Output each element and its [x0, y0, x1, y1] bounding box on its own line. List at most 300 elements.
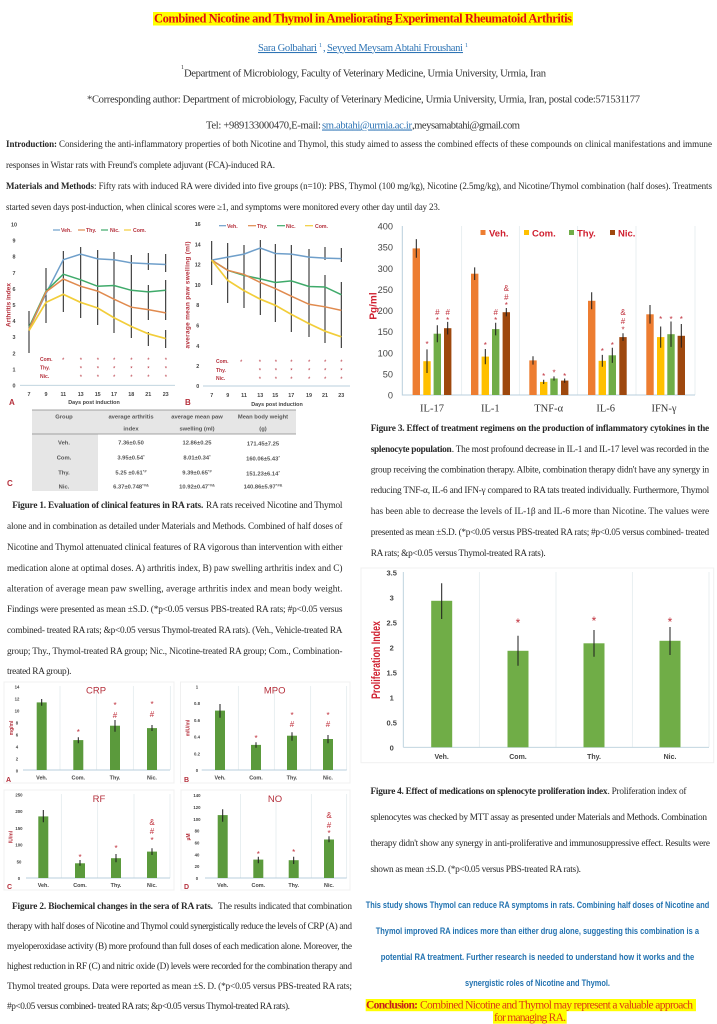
contact details: Tel: +989133000470,E-mail: — [206, 120, 321, 132]
panel 2A: CRP chart: CRP — [86, 686, 106, 696]
panel 2B: MPO chart: Thy. — [287, 776, 298, 782]
panel 2D: NO chart: & — [326, 811, 332, 820]
y axis title: Arthritis index — [6, 283, 12, 327]
figure 4 caption: Figure 4. Effect of medications on splenocyte proliferation index — [370, 787, 608, 797]
significance markers: * — [505, 301, 508, 310]
significance rows: Thy. — [40, 366, 51, 372]
table rows: *#& — [276, 482, 283, 488]
table rows: 151.23±6.14 — [246, 472, 278, 478]
table rows: Nic. — [59, 484, 70, 490]
category labels: Thy. — [587, 754, 601, 761]
y axis tick labels: 50 — [383, 369, 393, 379]
figure 4 caption: shown as mean ±S.D. (*p<0.05 versus PBS-treated RA rats). — [370, 864, 581, 875]
table rows: *#& — [208, 482, 215, 488]
y axis tick labels: 3.5 — [386, 568, 397, 578]
figure 1 caption: RA rats received Nicotine and Thymol — [206, 501, 343, 511]
line chart A: arthritis index — [6, 222, 175, 407]
conclusion: Combined Nicotine and Thymol may represent a valuable approach — [420, 1000, 693, 1012]
table header: Group — [55, 414, 73, 420]
significance markers — [516, 614, 673, 630]
table rows: 5.25 ±0.61 — [115, 470, 143, 476]
y axis tick labels: 16 — [195, 222, 201, 228]
panel 2A: CRP chart: * — [150, 700, 154, 709]
panel 2A: CRP chart: 4 — [16, 744, 19, 749]
panel 2D: NO chart: # — [327, 821, 332, 830]
significance rows — [216, 359, 343, 383]
panel letter C: C — [7, 479, 13, 488]
table rows: *# — [143, 468, 147, 474]
panel 2D: NO chart: NO — [268, 794, 282, 805]
y axis title: Proliferation Index — [369, 621, 383, 699]
figure 3 caption: presented as mean ±S.D. (*p<0.05 versus PBS-treated RA rats; #p<0.05 versus combined- treated — [371, 527, 710, 538]
line chart B: paw swelling — [184, 222, 350, 408]
figure 1 caption: Findings were presented as mean ±S.D. (*p<0.05 versus PBS-treated RA rats; #p<0.05 versus — [7, 604, 343, 615]
significance markers: # — [493, 308, 498, 317]
x axis tick labels: 11 — [60, 392, 66, 398]
figure 4 caption: . Proliferation index of — [608, 786, 687, 797]
panel 2C: RF chart: 150 — [15, 826, 23, 831]
figure 3 chart: cytokines — [368, 222, 695, 414]
figure 4 chart: proliferation index — [361, 568, 714, 763]
panel 2C: RF chart: 100 — [15, 843, 23, 848]
figure 3 caption: reducing TNF-α, IL-6 and IFN-γ compared to RA tats treated individually. Furthermore, Thymol — [371, 486, 710, 496]
y axis tick labels: 300 — [378, 264, 393, 274]
panel letter A: A — [9, 398, 15, 407]
y axis tick labels: 2 — [196, 364, 199, 370]
table header: average mean paw — [171, 414, 223, 420]
authors: Sara Golbahari — [258, 43, 317, 54]
table C: clinical feature summary — [7, 410, 296, 491]
significance rows: Com. — [40, 357, 53, 363]
significance rows: Nic. — [216, 376, 226, 382]
table rows: 10.92±0.47 — [179, 484, 208, 490]
panel 2A: CRP chart: 10 — [15, 708, 20, 714]
y axis tick labels: 2 — [12, 351, 16, 357]
panel 2B: MPO chart: 1 — [196, 684, 199, 690]
panel 2B: MPO chart: MPO — [264, 686, 286, 696]
significance rows: ****** — [80, 366, 168, 372]
affiliation: Department of Microbiology, Faculty of Veterinary Medicine, Urmia University, Urmia, Iran — [184, 68, 547, 80]
x axis tick labels — [28, 392, 169, 398]
table header: Mean body weight — [238, 414, 288, 420]
panel 2C: RF chart — [4, 790, 174, 891]
conclusion: Conclusion: — [366, 1000, 418, 1012]
error bars — [29, 247, 166, 353]
panel 2C: RF chart: RF — [93, 794, 106, 805]
contact details — [206, 120, 521, 132]
figure 2 caption: highest reduction in RF (C) and nitric oxide (D) levels were recorded for the combination therapy and — [7, 961, 352, 972]
x axis title: Days post induction — [68, 400, 120, 406]
y axis tick labels: 200 — [378, 306, 393, 316]
authors: 1 — [319, 43, 322, 49]
figure 3 caption — [371, 424, 710, 559]
panel 2D: NO chart: 80 — [195, 829, 200, 834]
y axis title: average mean paw swelling (ml) — [184, 242, 192, 348]
legend: Veh. — [61, 228, 72, 234]
significance rows: Com. — [216, 359, 229, 365]
panel 2D: NO chart: 120 — [193, 805, 201, 810]
table rows: * — [278, 454, 280, 460]
figure 1 caption: treated RA group). — [7, 666, 72, 677]
series: Com. — [212, 260, 341, 337]
panel 2B: MPO chart: # — [290, 720, 295, 729]
table rows: 160.06±5.43 — [246, 456, 278, 462]
y axis tick labels: 4 — [12, 319, 16, 325]
panel letter B: B — [185, 398, 191, 407]
panel 2B: MPO chart: B — [184, 777, 189, 784]
table rows: 7.36±0.50 — [118, 440, 144, 446]
panel 2D: NO chart: Com. — [252, 883, 266, 889]
significance rows: ****** — [80, 375, 168, 381]
category labels: IL-6 — [596, 404, 615, 414]
panel 2B: MPO chart: * — [254, 734, 258, 743]
panel 2D: NO chart — [181, 790, 350, 891]
summary statement: synergistic roles of Nicotine and Thymol. — [465, 978, 610, 988]
x axis tick labels: 21 — [322, 393, 328, 399]
figure 1 caption: alone and in combination as detailed under Materials and Methods. Combined of half doses of — [7, 521, 343, 532]
x axis tick labels: 11 — [241, 393, 247, 399]
legend: Thy. — [86, 228, 97, 234]
series: Thy. — [212, 260, 341, 310]
legend: Nic. — [286, 224, 296, 230]
panel 2A: CRP chart: 0 — [16, 768, 19, 773]
y axis tick labels — [195, 222, 201, 390]
x axis tick labels: 17 — [111, 392, 117, 398]
significance markers: * — [611, 341, 614, 350]
panel 2A: CRP chart: Com. — [72, 776, 86, 782]
x axis tick labels: 21 — [145, 392, 151, 398]
series: Nic. — [29, 274, 166, 327]
figure 2 caption: therapy with half doses of Nicotine and Thymol could synergistically reduce the levels of CRP (A) and — [7, 921, 352, 932]
conclusion: for managing RA. — [494, 1012, 566, 1024]
series: Veh. — [29, 254, 166, 329]
panel 2C: RF chart: Nic. — [147, 883, 157, 889]
category labels: TNF-α — [534, 404, 564, 414]
bars: Thy. — [434, 329, 675, 395]
significance markers: * — [680, 315, 683, 324]
significance markers: * — [542, 372, 545, 381]
legend — [219, 224, 329, 230]
panel 2A: CRP chart: A — [6, 777, 11, 784]
authors: Seyyed Meysam Abtahi Froushani — [327, 43, 463, 54]
conclusion — [366, 999, 696, 1024]
panel 2A: CRP chart: # — [150, 710, 155, 719]
significance markers: * — [669, 315, 673, 324]
panel 2C: RF chart: * — [114, 844, 118, 853]
x axis tick labels: 23 — [338, 393, 344, 399]
panel 2A: CRP chart: 14 — [15, 684, 20, 690]
significance markers: * — [659, 315, 662, 324]
panel 2B: MPO chart — [180, 682, 350, 784]
affiliation: 1 — [181, 65, 184, 71]
panel 2A: CRP chart: 6 — [16, 732, 19, 737]
y axis tick labels: 0 — [12, 384, 16, 390]
y axis tick labels: 6 — [12, 287, 16, 293]
panel 2B: MPO chart: 0.2 — [194, 751, 201, 756]
panel 2B: MPO chart: Nic. — [323, 776, 333, 782]
introduction text: Considering the anti-inflammatory properties of both Nicotine and Thymol, this study aimed to assess the combined effects of these compounds on clinical manifestations and immune — [59, 139, 712, 149]
significance markers: * — [425, 340, 429, 349]
y axis tick labels: 350 — [378, 243, 393, 253]
significance rows — [40, 357, 168, 381]
legend: Veh. — [227, 224, 238, 230]
materials and methods text: : Fifty rats with induced RA were divided into five groups (n=10): PBS, Thymol (100 mg/kg), Nicotine (2.5mg/kg), and Nicotine/Thymol combination (half doses). Treatments — [94, 181, 712, 191]
y axis tick labels: 100 — [378, 348, 393, 358]
x axis tick labels: 15 — [272, 393, 278, 399]
y axis tick labels: 9 — [12, 238, 16, 244]
table rows: 6.37±0.748 — [113, 484, 142, 490]
panel 2C: RF chart: 250 — [15, 792, 23, 798]
figure 2 caption: myeloperoxidase activity (B) more profound than full doses of each medication alone. Moreover, the — [7, 941, 352, 952]
figure 3 caption: group receiving the combination therapy. Albite, combination therapy didn't have any synergy in — [371, 466, 710, 476]
figure 1 caption: medication alone at optimal doses. A) arthritis index, B) paw swelling arthritis index and C) — [7, 563, 342, 574]
corresponding author: *Corresponding author: Department of microbiology, Faculty of Veterinary Medicine, Urmia University, Urmia, Iran, postal code:571531177 — [87, 94, 640, 106]
panel 2B: MPO chart: 0 — [196, 768, 199, 773]
y axis tick labels: 3 — [12, 335, 16, 341]
significance markers: * — [484, 341, 487, 350]
table rows: 3.95±0.54 — [117, 456, 143, 462]
figure 3 caption: . The most profound decrease in IL-1 and IL-17 level was recorded in the — [452, 444, 709, 455]
category labels: Veh. — [434, 754, 449, 761]
figure 1 caption: alteration of average mean paw swelling, average arthritis index and mean body weight. — [7, 584, 342, 594]
x axis tick labels: 7 — [28, 392, 30, 398]
series: Com. — [29, 294, 166, 339]
panel 2A: CRP chart: 12 — [15, 696, 20, 702]
panel 2A: CRP chart: 2 — [16, 756, 19, 761]
authors: 1 — [465, 43, 468, 49]
panel 2A: CRP chart: Veh. — [36, 776, 48, 782]
error bars — [442, 583, 670, 666]
panel 2D: NO chart: 60 — [195, 840, 200, 846]
panel 2C: RF chart: C — [7, 884, 12, 891]
category labels: Com. — [509, 754, 527, 761]
y axis title: Pg/ml — [368, 292, 380, 320]
x axis title: Days post induction — [251, 402, 303, 408]
x axis tick labels: 23 — [163, 392, 169, 398]
figure 1 caption: group; Thy., Thymol-treated RA group; Nic., Nicotine-treated RA group; Com., Combination- — [7, 647, 342, 657]
x axis tick labels: 7 — [210, 393, 213, 399]
panel 2C: RF chart: & — [149, 818, 155, 827]
contact details: sm.abtahi@urmia.ac.ir — [322, 120, 412, 132]
table rows: Thy. — [58, 470, 70, 476]
panel 2D: NO chart: * — [292, 848, 295, 857]
panel 2A: CRP chart — [4, 682, 174, 784]
significance markers: * — [563, 372, 566, 381]
category labels: IL-17 — [420, 404, 444, 414]
legend: Com. — [133, 228, 147, 234]
panel 2A: CRP chart: * — [77, 728, 80, 737]
figure 1 caption: Nicotine and Thymol attenuated clinical features of RA vigorous than intervention with either — [7, 542, 343, 553]
panel 2D: NO chart: Nic. — [324, 883, 334, 889]
panel 2D: NO chart: D — [184, 884, 189, 891]
panel 2B: MPO chart: * — [290, 711, 294, 720]
panel 2C: RF chart: IU/ml — [8, 830, 14, 843]
panel 2B: MPO chart: # — [326, 720, 331, 729]
x axis tick labels: 9 — [226, 393, 229, 399]
significance markers: * — [436, 316, 439, 325]
y axis tick labels — [11, 222, 17, 390]
error bars — [212, 240, 341, 348]
legend: Com. — [532, 228, 556, 240]
y axis tick labels: 8 — [196, 303, 199, 309]
panel 2A: CRP chart: Thy. — [110, 776, 121, 782]
table rows: 12.86±0.25 — [183, 440, 212, 446]
legend: Thy. — [577, 228, 596, 240]
introduction text — [6, 139, 712, 170]
panel 2B: MPO chart: * — [326, 711, 330, 720]
bars: Com. — [423, 337, 664, 395]
figure 3 caption: splenocyte population — [371, 445, 453, 455]
panel 2B: MPO chart: Veh. — [214, 776, 226, 782]
materials and methods text — [6, 181, 712, 212]
significance markers: & — [504, 284, 510, 293]
legend: Com. — [315, 224, 329, 230]
y axis tick labels: 10 — [11, 222, 17, 228]
figure 3 caption: has been able to decrease the levels of IL-1β and IL-6 more than Nicotine. The values were — [371, 506, 709, 517]
panel 2C: RF chart: * — [150, 836, 154, 845]
y axis tick labels: 0.5 — [386, 718, 397, 728]
figure 3 caption: Figure 3. Effect of treatment regimens on the production of inflammatory cytokines in the — [371, 424, 709, 434]
y axis tick labels: 150 — [378, 327, 393, 337]
panel 2A: CRP chart: 8 — [16, 720, 19, 725]
authors: , — [323, 43, 326, 54]
y axis tick labels: 7 — [12, 271, 16, 277]
significance markers: & — [620, 308, 626, 317]
x axis tick labels — [210, 393, 344, 399]
panel 2D: NO chart: 0 — [196, 876, 199, 881]
panel 2B: MPO chart: mIU/ml — [186, 719, 192, 736]
significance rows: ******* — [240, 360, 343, 366]
figure 2 caption — [7, 902, 352, 1012]
figure 2 caption: The results indicated that combination — [218, 902, 352, 912]
y axis tick labels: 2.5 — [386, 618, 397, 628]
significance markers: * — [668, 615, 673, 629]
table rows: 171.45±7.25 — [247, 442, 280, 448]
category labels: IL-1 — [481, 404, 500, 414]
y axis tick labels — [386, 568, 397, 752]
category labels: IFN-γ — [651, 404, 677, 414]
category labels: Nic. — [664, 754, 676, 761]
significance rows: ******* — [62, 358, 168, 364]
panel 2D: NO chart: * — [327, 829, 331, 838]
significance markers: * — [516, 616, 521, 630]
panel 2A: CRP chart: Nic. — [147, 776, 157, 782]
figure 1 caption — [7, 501, 343, 677]
panel 2C: RF chart: 50 — [17, 860, 22, 864]
figure 1 caption: Figure 1. Evaluation of clinical features in RA rats. — [12, 501, 203, 511]
y axis tick labels: 3 — [390, 594, 394, 602]
y axis tick labels: 1 — [12, 367, 16, 373]
series: Veh. — [212, 248, 341, 260]
panel 2C: RF chart: 0 — [18, 876, 21, 881]
panel 2D: NO chart: Veh. — [217, 883, 229, 889]
table rows: *#& — [142, 482, 149, 488]
panel 2B: MPO chart: 0.4 — [194, 734, 201, 740]
table rows: * — [278, 470, 280, 474]
significance rows: ****** — [259, 368, 343, 374]
panel 2D: NO chart: µM — [186, 833, 192, 841]
panel 2B: MPO chart: 0.8 — [194, 701, 201, 706]
panel 2A: CRP chart: * — [113, 701, 117, 710]
y axis tick labels: 14 — [195, 242, 201, 248]
significance markers: * — [621, 326, 625, 334]
significance markers: # — [504, 293, 509, 302]
y axis tick labels — [378, 222, 393, 400]
significance markers: # — [445, 308, 450, 317]
figure 2 caption: Thymol treated groups. Data were reported as mean ±S. D. (*p<0.05 versus PBS-treated RA rats; — [7, 981, 352, 992]
legend: Thy. — [257, 224, 268, 230]
significance markers: * — [446, 316, 449, 325]
significance rows: Thy. — [216, 368, 227, 374]
category labels — [434, 754, 676, 761]
panel 2D: NO chart: 40 — [195, 852, 200, 857]
table header: average arthritis — [108, 414, 154, 420]
x axis tick labels: 13 — [78, 392, 84, 398]
x axis tick labels: 13 — [257, 393, 263, 399]
panel 2A: CRP chart: # — [113, 711, 118, 720]
materials and methods text: started seven days post-induction, when clinical scores were ≥1, and symptoms were monitored every other day until day 23. — [6, 202, 440, 212]
y axis tick labels: 1 — [390, 694, 394, 702]
table rows: 140.86±5.97 — [244, 484, 276, 490]
bars — [431, 601, 680, 747]
significance markers: * — [592, 614, 597, 628]
table rows: 8.01±0.34 — [183, 456, 209, 462]
significance markers: * — [601, 347, 604, 356]
significance rows: ****** — [259, 377, 343, 383]
x axis tick labels: 15 — [95, 392, 101, 398]
panel 2B: MPO chart: Com. — [249, 776, 263, 782]
figure 4 caption: splenocytes was checked by MTT assay as presented under Materials and Methods. Combination — [370, 813, 707, 823]
panel 2D: NO chart: Thy. — [288, 883, 300, 889]
significance markers: # — [621, 317, 626, 326]
panel 2B: MPO chart: 0.6 — [194, 718, 201, 723]
legend: Veh. — [489, 228, 509, 240]
figure 2 caption: #p<0.05 versus combined- treated RA rats; &p<0.05 versus Thymol-treated RA rats). — [7, 1001, 290, 1012]
title: Combined Nicotine and Thymol in Ameliorating Experimental Rheumatoid Arthritis — [154, 12, 572, 26]
introduction text: Introduction: — [6, 139, 57, 149]
legend — [53, 228, 147, 234]
y axis tick labels: 10 — [195, 283, 201, 289]
y axis tick labels: 0 — [388, 390, 393, 400]
y axis tick labels: 12 — [195, 263, 201, 269]
table header: (g) — [259, 426, 267, 432]
y axis tick labels: 0 — [196, 384, 199, 390]
table rows: 9.39±0.65 — [182, 470, 208, 476]
figure 2 caption: Figure 2. Biochemical changes in the sera of RA rats. — [12, 902, 213, 912]
materials and methods text: Materials and Methods — [6, 181, 94, 191]
table header: swelling (ml) — [179, 426, 215, 432]
table rows: * — [209, 454, 211, 458]
figure 1 caption: combined- treated RA rats; &p<0.05 versus Thymol-treated RA rats). (Veh., Vehicle-treated RA — [7, 625, 343, 636]
significance markers: * — [552, 368, 556, 378]
introduction text: responses in Wistar rats with Freund's complete adjuvant (FCA)-induced RA. — [6, 160, 275, 170]
table rows: Com. — [57, 456, 72, 462]
table rows: * — [143, 454, 145, 458]
panel 2C: RF chart: # — [150, 827, 155, 836]
bars: Veh. — [413, 248, 654, 395]
table rows: *# — [208, 468, 213, 474]
series: Thy. — [29, 279, 166, 329]
y axis tick labels: 4 — [196, 344, 199, 350]
panel 2C: RF chart: Veh. — [38, 883, 49, 889]
panel 2D: NO chart: 140 — [193, 793, 201, 798]
y axis tick labels: 400 — [378, 222, 393, 232]
y axis tick labels: 0 — [390, 744, 394, 752]
authors — [258, 43, 468, 54]
y axis tick labels: 8 — [12, 255, 16, 261]
summary statement — [366, 900, 709, 988]
category labels — [420, 404, 677, 414]
